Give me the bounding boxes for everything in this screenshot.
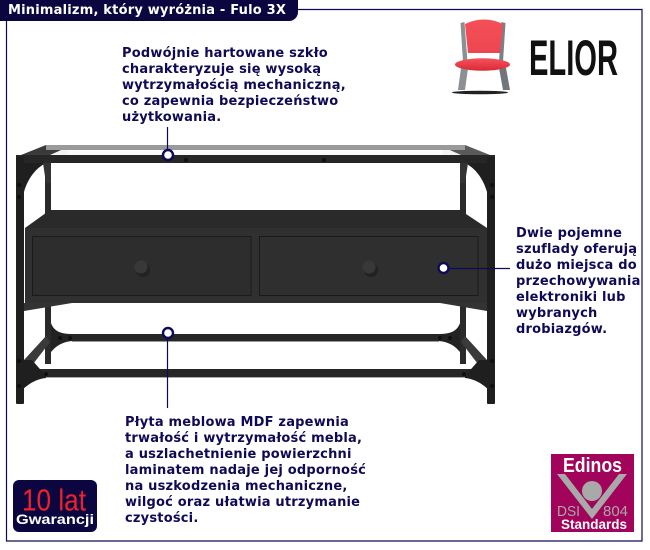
badge: Edinos DSI 804 Standards: Standards xyxy=(561,516,627,532)
lower rails xyxy=(60,334,450,341)
left drawer knob xyxy=(136,263,150,277)
rail highlights xyxy=(72,341,439,342)
badge: Edinos DSI 804 Standards xyxy=(551,454,634,532)
badge: 10 years warranty: 10 lat xyxy=(22,482,86,518)
back legs xyxy=(45,160,51,364)
badge: Edinos DSI 804 Standards: 804 xyxy=(603,503,628,520)
leader: MDF board xyxy=(163,328,173,408)
glass top xyxy=(16,145,495,163)
title banner xyxy=(0,0,298,21)
text: tempered glass: co zapewnia bezpieczeństwo xyxy=(122,94,338,109)
furniture: TV stand xyxy=(16,145,495,404)
badge: Edinos DSI 804 Standards: Edinos xyxy=(563,455,622,477)
badge: Edinos DSI 804 Standards: DSI xyxy=(557,503,580,520)
bottom brackets and braces xyxy=(51,323,72,352)
bolts xyxy=(17,158,494,388)
text: MDF board: Płyta meblowa MDF zapewnia xyxy=(125,415,349,430)
leader: drawers xyxy=(438,263,510,273)
badge: 10 years warranty: Gwarancji xyxy=(16,511,94,527)
text: drawers: przechowywania xyxy=(516,274,641,289)
logo: Elior chair xyxy=(452,20,510,94)
cabinet xyxy=(25,210,487,228)
text: tempered glass: wytrzymałością mechaniczną, xyxy=(122,78,346,93)
text: MDF board: na uszkodzenia mechaniczne, xyxy=(125,479,348,494)
text: drawers: elektroniki lub xyxy=(516,290,626,305)
right drawer knob xyxy=(364,263,378,277)
front legs xyxy=(16,157,24,404)
text: MDF board: trwałość i wytrzymałość mebla, xyxy=(125,431,362,446)
left drawer xyxy=(32,236,251,296)
text: tempered glass: użytkowania. xyxy=(122,110,221,125)
text: drawers: drobiazgów. xyxy=(516,322,607,337)
text: MDF board xyxy=(125,415,366,526)
leader: glass xyxy=(163,127,173,160)
text: MDF board: a uszlachetnienie powierzchni xyxy=(125,447,352,462)
top corner brackets xyxy=(24,163,46,192)
right drawer xyxy=(260,236,478,296)
text: drawers: Dwie pojemne xyxy=(516,226,622,241)
text: tempered glass xyxy=(122,46,346,125)
text: drawers xyxy=(516,226,641,337)
text: drawers: szuflady oferują xyxy=(516,242,637,257)
badge: 10 years warranty xyxy=(13,480,97,532)
text: MDF board: laminatem nadaje jej odporność xyxy=(125,463,366,478)
text: drawers: dużo miejsca do xyxy=(516,258,637,273)
text: tempered glass: charakteryzuje się wysoką xyxy=(122,62,321,77)
title banner: Minimalizm, który wyróżnia - Fulo 3X xyxy=(8,3,286,18)
top front rail xyxy=(16,155,495,163)
text: MDF board: czystości. xyxy=(125,511,198,526)
text: tempered glass: Podwójnie hartowane szkło xyxy=(122,46,328,61)
text: MDF board: wilgoć oraz ułatwia utrzymanie xyxy=(125,495,360,510)
text: drawers: wybranych xyxy=(516,306,597,321)
